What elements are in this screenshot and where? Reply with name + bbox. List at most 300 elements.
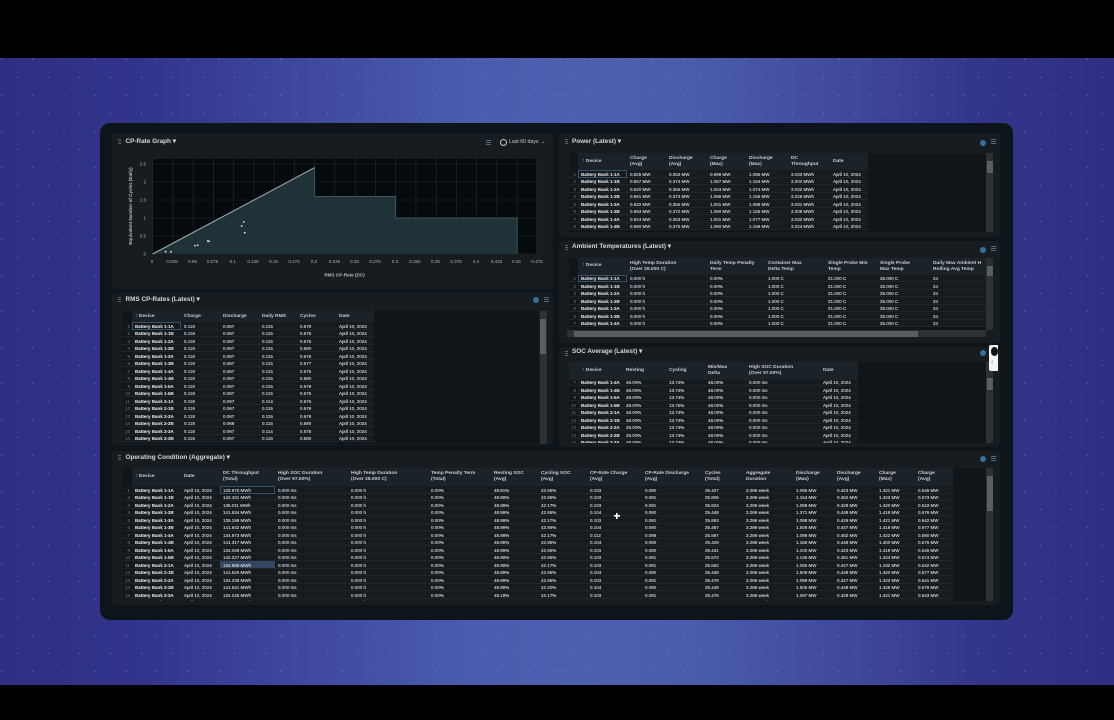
table: RMS CP-Rates: 0.575 — [300, 369, 311, 374]
table: Operating Condition: 1.421 MW — [879, 518, 900, 523]
table: RMS CP-Rates: Battery Bank 2-1B — [135, 406, 174, 411]
table: Operating Condition: 0.580 MW — [918, 533, 939, 538]
table: Ambient Temperatures: 21.000 C — [828, 299, 846, 304]
table: Ambient Temperatures: 0.00% — [710, 276, 723, 281]
table: Operating Condition: 42.95% — [541, 510, 556, 515]
table: Operating Condition: 3.286 week — [746, 525, 769, 530]
table: RMS CP-Rates: 0.115 — [262, 339, 273, 344]
table: SOC Average: Battery Bank 2-1B — [581, 418, 620, 423]
table: Operating Condition: April 10, 2024 — [184, 555, 212, 560]
scrollbar: Ambient table horizontal — [567, 330, 986, 337]
table: Operating Condition: 12 — [125, 570, 130, 575]
table: Operating Condition: 0.000 ms — [278, 518, 297, 523]
chart: CP-rate envelope and scatter: Equivalent Number of Cycles (Daily) — [128, 167, 133, 245]
table: Power: 1.077 MW — [749, 217, 770, 222]
table: RMS CP-Rates: 0.067 — [223, 339, 234, 344]
table: Operating Condition: 25.429 — [705, 540, 719, 545]
table: SOC Average: 48.00% — [708, 388, 723, 393]
table: RMS CP-Rates: 0.575 — [300, 339, 311, 344]
table: Operating Condition: 0.542 MW — [918, 518, 939, 523]
table: Operating Condition: 1.418 MW — [879, 525, 900, 530]
table: Operating Condition: 0.00% — [431, 533, 444, 538]
table: Operating Condition: 0.000 h — [351, 518, 366, 523]
table: Operating Condition: 4 — [127, 510, 130, 515]
table: RMS CP-Rates: 0.119 — [184, 406, 195, 411]
table: Operating Condition: 3.286 week — [746, 495, 769, 500]
table: Operating Condition: 0.577 MW — [918, 570, 939, 575]
table: Operating Condition: (Avg) — [918, 477, 930, 482]
table: Operating Condition: 142.431 MWh — [223, 495, 251, 500]
table: Operating Condition: 1.424 MW — [879, 555, 900, 560]
table: Power: 0.353 MW — [669, 217, 690, 222]
table: RMS CP-Rates: 0.067 — [223, 369, 234, 374]
chart: CP-rate envelope and scatter: 0.2 — [311, 259, 318, 264]
table: Power: (Avg) — [630, 162, 642, 166]
table: Operating Condition: Charge — [918, 471, 935, 476]
panel: SOC Average (Latest) — [559, 347, 1000, 447]
table: Operating Condition: (Avg) — [541, 477, 553, 482]
chart: CP-rate envelope and scatter: 0.175 — [288, 259, 300, 264]
table: Operating Condition: 0.573 MW — [918, 495, 939, 500]
table: RMS CP-Rates: 0.118 — [184, 354, 195, 359]
table: Operating Condition: Discharge — [796, 471, 820, 476]
table: Power: April 10, 2024 — [833, 224, 861, 229]
table: Ambient Temperatures: 21.000 C — [828, 284, 846, 289]
table: Operating Condition: 0.000 ms — [278, 510, 297, 515]
table: RMS CP-Rates: 13 — [125, 414, 130, 419]
table: Power: Charge — [630, 156, 647, 160]
table: RMS CP-Rates: 12 — [125, 406, 130, 411]
table: Power: Battery Bank 1-1B — [581, 179, 620, 184]
table: SOC Average: 0.000 ms — [749, 388, 768, 393]
table: Operating Condition: 25.809 — [705, 495, 719, 500]
table: RMS CP-Rates: 0.115 — [262, 324, 273, 328]
table: Operating Condition: 48.86% — [494, 495, 509, 500]
table: RMS CP-Rates: 15 — [125, 429, 130, 434]
table: RMS CP-Rates: 0.576 — [300, 414, 311, 419]
table: Operating Condition: April 10, 2024 — [184, 585, 212, 590]
table: Ambient Temperatures: Battery Bank 1-2A — [581, 291, 620, 296]
chart: CP-rate envelope and scatter: 0.45 — [512, 259, 521, 264]
table: Operating Condition: 25.476 — [705, 593, 719, 598]
table: Ambient Temperatures: Daily Max Ambient H — [933, 260, 981, 266]
table: Operating Condition: 48.18% — [494, 593, 509, 598]
table: Operating Condition: 134.873 MWh — [223, 533, 251, 538]
table: Ambient Temperatures: 25.000 C — [880, 306, 898, 311]
table: Ambient Temperatures: 1.000 C — [768, 306, 784, 311]
table: Ambient Temperatures: 21.000 C — [828, 306, 846, 311]
table: Operating Condition: 0.000 h — [351, 570, 366, 575]
panel: CP-Rate Graph: CP-Rate Graph ▾ — [126, 138, 176, 145]
table: Operating Condition: 0.081 — [645, 518, 656, 523]
table: Power: Discharge — [669, 156, 693, 160]
table: Power: 5 — [573, 202, 576, 207]
table: SOC Average: 13.74% — [669, 410, 684, 415]
table: Operating Condition: 0.103 — [590, 563, 601, 568]
table: Ambient Temperatures: Container Max — [768, 260, 802, 266]
table: Operating Condition: 0.000 h — [351, 563, 366, 568]
table: Ambient Temperatures: 2 — [573, 284, 576, 289]
table: SOC Average: 48.00% — [708, 403, 723, 408]
table: Power: 7 — [573, 217, 576, 222]
table: SOC Average: 48.00% — [626, 433, 641, 438]
table: SOC Average: 48.00% — [626, 380, 641, 385]
table: Operating Condition: 0.452 MW — [837, 533, 858, 538]
table: SOC Average: Min/Max — [708, 364, 727, 370]
table: Operating Condition: (Avg) — [590, 477, 602, 482]
table: Operating Condition: 0.427 MW — [837, 578, 858, 583]
chart: CP-rate envelope and scatter: 0.375 — [450, 259, 462, 264]
table: Power: April 10, 2024 — [833, 194, 861, 199]
table: Operating Condition: (Total) — [431, 477, 446, 482]
table: Power: Battery Bank 1-3B — [581, 209, 620, 214]
table: Operating Condition: 0.543 MW — [918, 503, 939, 508]
table: Ambient Temperatures: 0.00% — [710, 314, 723, 319]
chart: CP-rate envelope and scatter: 0.225 — [329, 259, 341, 264]
table: Power: 1.088 MW — [749, 202, 770, 207]
table: Operating Condition: 0.000 ms — [278, 570, 297, 575]
table: Power: 1.056 MW — [710, 194, 731, 199]
table: SOC Average: 48.00% — [708, 418, 723, 423]
table: Operating Condition: 0.000 h — [351, 525, 366, 530]
table: Power: 0.353 MW — [669, 172, 690, 176]
chart: CP-rate envelope and scatter: 0.125 — [247, 259, 259, 264]
table: Ambient Temperatures: Daily Temp Penalty — [710, 260, 754, 266]
table: Operating Condition: 25.446 — [705, 570, 719, 575]
table: RMS CP-Rates: 0.580 — [300, 346, 311, 351]
table: RMS CP-Rates: Battery Bank 1-4B — [135, 376, 174, 381]
table: Power — [569, 153, 986, 232]
table: Power: April 10, 2024 — [833, 172, 861, 176]
table: Operating Condition: 0.545 MW — [918, 488, 939, 492]
table: RMS CP-Rates: Battery Bank 2-3B — [135, 436, 174, 441]
table: Power: 3.032 MWh — [791, 187, 814, 192]
table: RMS CP-Rates: April 10, 2024 — [339, 376, 367, 381]
table: SOC Average: 0.000 ms — [749, 380, 768, 385]
table: Ambient Temperatures: 0.00% — [710, 299, 723, 304]
table: SOC Average: April 10, 2024 — [823, 380, 851, 385]
table: Power: 0.375 MW — [669, 224, 690, 229]
table: RMS CP-Rates: Battery Bank 2-3A — [135, 429, 174, 434]
table: Operating Condition: 48.86% — [494, 555, 509, 560]
table: Operating Condition: 1.425 MW — [879, 585, 900, 590]
panel: CP-Rate Graph — [112, 133, 553, 289]
table: RMS CP-Rates: 1 — [127, 324, 130, 328]
chart: CP-rate envelope and scatter: 1.5 — [140, 198, 146, 202]
table: Operating Condition: 3.286 week — [746, 585, 769, 590]
table: Operating Condition: 0.00% — [431, 563, 444, 568]
table: Operating Condition: 25.624 — [705, 503, 719, 508]
table: Power: ↑ Device — [582, 158, 602, 164]
table: Operating Condition: Resting SOC — [494, 471, 524, 476]
chart: CP-rate envelope and scatter: 0.075 — [207, 259, 219, 264]
table: Operating Condition: 0.104 — [590, 525, 601, 530]
table: Power: 0.355 MW — [669, 202, 690, 207]
table: RMS CP-Rates: 0.118 — [184, 399, 195, 404]
table: RMS CP-Rates: April 10, 2024 — [339, 339, 367, 344]
table: Operating Condition: April 10, 2024 — [184, 510, 212, 515]
chart: CP-rate envelope and scatter: 0.1 — [230, 259, 236, 264]
table: SOC Average: 13.74% — [669, 388, 684, 393]
table: RMS CP-Rates: Cycles — [300, 314, 316, 318]
table: RMS CP-Rates: 0.067 — [223, 414, 234, 419]
table: Operating Condition: Battery Bank 1-5B — [135, 555, 174, 560]
table: Power: 1.155 MW — [749, 194, 770, 199]
table: Operating Condition: 1.088 MW — [796, 503, 817, 508]
table: Operating Condition: 42.95% — [541, 540, 556, 545]
table: Operating Condition: 1.400 MW — [879, 540, 900, 545]
table: RMS CP-Rates: Battery Bank 2-2B — [135, 421, 174, 426]
table: Ambient Temperatures: 25.000 C — [880, 291, 898, 296]
table: Operating Condition: 0.00% — [431, 570, 444, 575]
table: RMS CP-Rates: 8 — [127, 376, 130, 381]
table: RMS CP-Rates: April 10, 2024 — [339, 354, 367, 359]
table: SOC Average: 48.00% — [626, 403, 641, 408]
chart: CP-rate envelope and scatter: 0.3 — [392, 259, 399, 264]
table: Power: 1.085 MW — [749, 172, 770, 176]
table: Operating Condition: 0.103 — [590, 495, 601, 500]
table: Operating Condition: 0.000 h — [351, 503, 366, 508]
table: SOC Average: Battery Bank 1-4A — [581, 380, 620, 385]
table: Operating Condition: 0.543 MW — [918, 593, 939, 598]
table: Operating Condition: 0.00% — [431, 540, 444, 545]
table: RMS CP-Rates: April 10, 2024 — [339, 331, 367, 336]
table: Operating Condition: April 10, 2024 — [184, 578, 212, 583]
chart: CP-rate envelope and scatter: 0.25 — [350, 259, 359, 264]
table: Operating Condition: 0.000 ms — [278, 563, 297, 568]
table: SOC Average: 48.00% — [626, 388, 641, 393]
table: Ambient Temperatures: 0.00% — [710, 321, 723, 326]
table: SOC Average: 48.00% — [626, 425, 641, 430]
table: Ambient Temperatures: Battery Bank 1-2B — [581, 299, 620, 304]
table: Ambient Temperatures: ↑ Device — [582, 263, 602, 268]
table: RMS CP-Rates: 3 — [127, 339, 130, 344]
table: Ambient Temperatures: 1.000 C — [768, 284, 784, 289]
table: RMS CP-Rates: 6 — [127, 361, 130, 366]
table: Power: Battery Bank 1-2B — [581, 194, 620, 199]
table: Power: 1.060 MW — [710, 224, 731, 229]
table: RMS CP-Rates: April 10, 2024 — [339, 406, 367, 411]
table: Operating Condition: 0.081 — [645, 555, 656, 560]
table: Operating Condition: 0.451 MW — [837, 555, 858, 560]
table: Operating Condition: 0.00% — [431, 510, 444, 515]
table: Operating Condition: 25.476 — [705, 578, 719, 583]
table: Operating Condition: 134.689 MWh — [223, 563, 251, 568]
chart: CP-rate envelope and scatter: 0.05 — [188, 259, 197, 264]
table: Ambient Temperatures: 25.000 C — [880, 299, 898, 304]
table: RMS CP-Rates: 0.579 — [300, 384, 311, 389]
table: RMS CP-Rates: 0.067 — [223, 346, 234, 351]
table: Operating Condition: 0.103 — [590, 578, 601, 583]
table: SOC Average: 7 — [573, 380, 576, 385]
table: Operating Condition: 42.95% — [541, 495, 556, 500]
table: Ambient Temperatures: Battery Bank 1-1A — [581, 276, 620, 281]
table: Power: Battery Bank 1-2A — [581, 187, 620, 192]
table: Power: 0.624 MW — [630, 217, 651, 222]
table: RMS CP-Rates: 16 — [125, 436, 130, 441]
table: Operating Condition: 0.080 — [645, 510, 656, 515]
table: Operating Condition: 42.95% — [541, 548, 556, 553]
table: SOC Average: 9 — [573, 395, 576, 400]
table: RMS CP-Rates: ↑ Device — [135, 314, 155, 318]
table: Ambient Temperatures: 21.000 C — [828, 291, 846, 296]
table: Operating Condition: 0.576 MW — [918, 585, 939, 590]
table: RMS CP-Rates — [122, 311, 539, 444]
table: Power: 1.004 MW — [710, 187, 731, 192]
table: RMS CP-Rates: 0.575 — [300, 399, 311, 404]
table: Operating Condition: 9 — [127, 548, 130, 553]
table: RMS CP-Rates: 14 — [125, 421, 130, 426]
table: Operating Condition: 0.428 MW — [837, 503, 858, 508]
panel: CP-Rate Graph: Last 60 days ⌄ — [509, 139, 546, 145]
table: Operating Condition: 0.000 ms — [278, 533, 297, 538]
table: Operating Condition: 25.449 — [705, 585, 719, 590]
table: Power: 6 — [573, 209, 576, 214]
table: Operating Condition: 42.17% — [541, 503, 556, 508]
table: Operating Condition: Battery Bank 2-1A — [135, 563, 174, 568]
table: SOC Average: 13.74% — [669, 418, 684, 423]
table: Operating Condition: 0.103 — [590, 548, 601, 553]
table: RMS CP-Rates: 0.067 — [223, 376, 234, 381]
table: Operating Condition: Battery Bank 1-4B — [135, 540, 174, 545]
table: Operating Condition: 42.95% — [541, 570, 556, 575]
table: Power: Battery Bank 1-1A — [581, 172, 620, 176]
table: RMS CP-Rates: 0.067 — [223, 391, 234, 396]
table: Operating Condition: 1.085 MW — [796, 563, 817, 568]
table: Operating Condition: 42.17% — [541, 518, 556, 523]
table: RMS CP-Rates: 0.114 — [262, 429, 273, 434]
scrollbar: Operating Condition table — [986, 468, 993, 601]
table: Operating Condition: 48.81% — [494, 488, 509, 492]
table: Operating Condition: 0.448 MW — [837, 585, 858, 590]
table: Power: 1.154 MW — [749, 179, 770, 184]
table: Operating Condition: Discharge — [837, 471, 861, 476]
table: Operating Condition: Battery Bank 2-2A — [135, 578, 174, 583]
table: Operating Condition: 0.00% — [431, 585, 444, 590]
table: Operating Condition: ↑ Device — [135, 474, 155, 479]
table: Ambient Temperatures: 5 — [573, 306, 576, 311]
table: Ambient Temperatures: Single Probe Min — [828, 260, 868, 266]
table: RMS CP-Rates: 2 — [127, 331, 130, 336]
table: RMS CP-Rates: April 10, 2024 — [339, 384, 367, 389]
table: Ambient Temperatures: 0.000 h — [630, 299, 645, 304]
table: RMS CP-Rates: 0.577 — [300, 361, 311, 366]
table: Operating Condition: 48.86% — [494, 540, 509, 545]
table: Operating Condition: 10 — [125, 555, 130, 560]
table: Operating Condition: 0.000 ms — [278, 488, 297, 492]
table: Operating Condition: High SOC Duration — [278, 471, 322, 476]
table: Operating Condition: 0.00% — [431, 518, 444, 523]
table: SOC Average: 13.74% — [669, 425, 684, 430]
table: SOC Average: 13 — [571, 425, 576, 430]
table: RMS CP-Rates: 0.119 — [184, 346, 195, 351]
table: Operating Condition: 134.245 MWh — [223, 593, 251, 598]
table: SOC Average: (Over 97.00%) — [749, 370, 781, 376]
table: Power: DC — [791, 156, 798, 160]
table: Ambient Temperatures — [569, 258, 986, 330]
table: Ambient Temperatures: (Over 28.000 C) — [630, 266, 666, 272]
table: RMS CP-Rates: 0.067 — [223, 429, 234, 434]
table: Operating Condition: 3.286 week — [746, 510, 769, 515]
table: Operating Condition: 48.86% — [494, 563, 509, 568]
table: Operating Condition: 1.145 MW — [796, 555, 817, 560]
table: Operating Condition: High Temp Duration — [351, 471, 397, 476]
chart: CP-rate envelope and scatter: 0.275 — [369, 259, 381, 264]
table: Operating Condition: 141.525 MWh — [223, 570, 251, 575]
table: SOC Average: 0.000 ms — [749, 418, 768, 423]
table: Operating Condition: Battery Bank 1-3A — [135, 518, 174, 523]
table: Operating Condition: 0.423 MW — [837, 548, 858, 553]
table: RMS CP-Rates: 0.115 — [262, 354, 273, 359]
table: RMS CP-Rates: 0.118 — [184, 391, 195, 396]
table: Operating Condition: 0.000 h — [351, 548, 366, 553]
table: Operating Condition: 3.286 week — [746, 548, 769, 553]
table: SOC Average: 13.74% — [669, 395, 684, 400]
table: Power: Date — [833, 158, 844, 164]
panel: Operating Condition (Aggregate): Operating Condition (Aggregate) ▾ — [126, 454, 230, 461]
table: SOC Average: April 10, 2024 — [823, 425, 851, 430]
table: Operating Condition: 3.286 week — [746, 563, 769, 568]
table: Operating Condition: 25.467 — [705, 525, 719, 530]
table: RMS CP-Rates: 0.580 — [300, 421, 311, 426]
table: RMS CP-Rates: 5 — [127, 354, 130, 359]
table: Operating Condition: 48.86% — [494, 585, 509, 590]
table: RMS CP-Rates: 9 — [127, 384, 130, 389]
table: Operating Condition: 0.00% — [431, 495, 444, 500]
table: Ambient Temperatures: 24 — [933, 306, 938, 311]
table: Operating Condition: April 10, 2024 — [184, 488, 212, 492]
table: SOC Average: Delta — [708, 370, 720, 376]
table: Ambient Temperatures: Delta Temp — [768, 266, 794, 272]
table: Operating Condition: 3.286 week — [746, 533, 769, 538]
table: SOC Average: 48.00% — [708, 410, 723, 415]
table: RMS CP-Rates: Battery Bank 1-3B — [135, 361, 174, 366]
table: Ambient Temperatures: 4 — [573, 299, 576, 304]
table: Operating Condition: 0.081 — [645, 495, 656, 500]
table: Operating Condition: Battery Bank 1-1B — [135, 495, 174, 500]
table: Power: April 10, 2024 — [833, 179, 861, 184]
table: SOC Average: 8 — [573, 388, 576, 393]
panel: Power (Latest) — [559, 133, 1000, 237]
table: Ambient Temperatures: 0.000 h — [630, 291, 645, 296]
table: Operating Condition: 8 — [127, 540, 130, 545]
table: Power: 0.372 MW — [669, 209, 690, 214]
table: Operating Condition: 1.154 MW — [796, 495, 817, 500]
table: Operating Condition: 13 — [125, 578, 130, 583]
table: Operating Condition: 0.00% — [431, 578, 444, 583]
table: SOC Average: April 10, 2024 — [823, 403, 851, 408]
table: Ambient Temperatures: Single Probe — [880, 260, 910, 266]
table: Operating Condition: 1.088 MW — [796, 518, 817, 523]
table: Operating Condition: 0.429 MW — [837, 518, 858, 523]
table: Operating Condition: 25.587 — [705, 533, 719, 538]
table: Operating Condition: 1.088 MW — [796, 533, 817, 538]
table: RMS CP-Rates: 0.119 — [184, 436, 195, 441]
table: Operating Condition: 25.427 — [705, 488, 719, 492]
table: Operating Condition: 0.112 — [590, 533, 601, 538]
table: Operating Condition: Duration — [746, 477, 766, 482]
chart: CP-rate envelope and scatter: 0.425 — [491, 259, 503, 264]
table: RMS CP-Rates: 11 — [125, 399, 130, 404]
table: RMS CP-Rates: Battery Bank 1-3A — [135, 354, 174, 359]
table: Operating Condition: 133.975 MWh — [223, 488, 251, 492]
table: Operating Condition: 141.642 MWh — [223, 525, 251, 530]
panel: Power (Latest): Power (Latest) ▾ — [572, 138, 621, 145]
table: Operating Condition: Battery Bank 1-2A — [135, 503, 174, 508]
table: Operating Condition: April 10, 2024 — [184, 533, 212, 538]
scrollbar: SOC table — [986, 362, 993, 443]
table: Power: 1 — [573, 172, 576, 176]
